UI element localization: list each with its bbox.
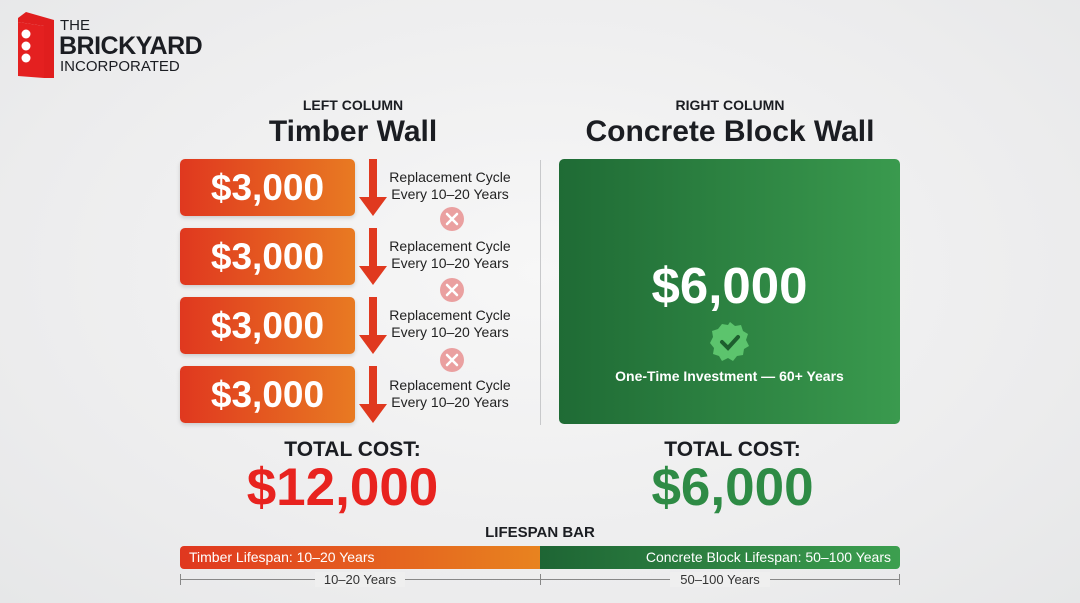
panel: concrete: One-Time Investment — 60+ Years: [615, 368, 844, 384]
replacement labels: Replacement Cycle: [389, 169, 511, 185]
total: timber: TOTAL COST:: [284, 438, 421, 461]
panel: timber costs: Replacement Cycle: [389, 238, 511, 254]
cost box 1: [180, 159, 355, 216]
scale: [180, 572, 900, 587]
logo: INCORPORATED: [60, 58, 180, 75]
logo: THE: [60, 17, 90, 34]
cost box 3: [180, 297, 355, 354]
divider: [540, 160, 541, 425]
total: concrete: TOTAL COST:: [664, 438, 801, 461]
heading: right column: RIGHT COLUMN: [676, 97, 784, 113]
panel: timber costs: Every 10–20 Years: [391, 394, 509, 410]
lifespan bar title: LIFESPAN BAR: [485, 524, 595, 541]
cost box 2: [180, 228, 355, 285]
cost box 2: $3,000: [211, 236, 324, 277]
heading: left column: [269, 97, 437, 148]
heading: left column: Timber Wall: [269, 115, 437, 148]
cost box 3: $3,000: [211, 305, 324, 346]
cost box 4: $3,000: [211, 374, 324, 415]
panel: concrete: [559, 159, 900, 424]
icon: check badge: [710, 322, 749, 361]
lifespan bar: Concrete Block Lifespan: 50–100 Years: [646, 549, 891, 565]
logo: [18, 12, 202, 78]
total: timber: $12,000: [247, 458, 438, 517]
cost box 4: [180, 366, 355, 423]
panel: timber costs: Every 10–20 Years: [391, 255, 509, 271]
heading: right column: [586, 97, 874, 148]
heading: right column: Concrete Block Wall: [586, 115, 874, 148]
panel: timber costs: [178, 159, 511, 426]
panel: timber costs: Replacement Cycle: [389, 377, 511, 393]
panel: concrete: $6,000: [652, 257, 808, 314]
panel: timber costs: Replacement Cycle: [389, 307, 511, 323]
lifespan bar: [180, 546, 900, 569]
panel: timber costs: Every 10–20 Years: [391, 324, 509, 340]
total: concrete: $6,000: [651, 458, 814, 517]
heading: left column: LEFT COLUMN: [303, 97, 403, 113]
scale: 50–100 Years: [680, 572, 760, 587]
logo: BRICKYARD: [59, 32, 202, 60]
arrows: [359, 159, 387, 423]
lifespan bar: Timber Lifespan: 10–20 Years: [189, 549, 374, 565]
cost box 1: $3,000: [211, 167, 324, 208]
scale: 10–20 Years: [324, 572, 396, 587]
x badges: [440, 207, 464, 372]
replacement labels: [389, 169, 511, 202]
replacement labels: Every 10–20 Years: [391, 186, 509, 202]
